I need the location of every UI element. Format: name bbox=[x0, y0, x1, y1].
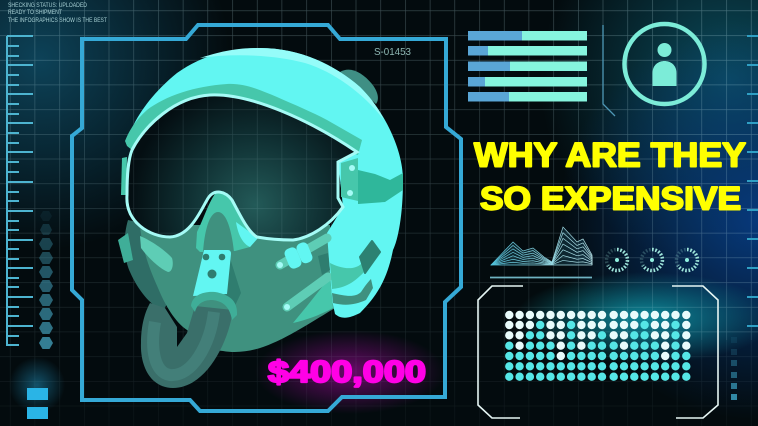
icon: user in circle bbox=[624, 24, 704, 104]
left ruler bbox=[7, 36, 33, 346]
helmet band bbox=[125, 84, 362, 155]
title: WHY ARE THEY bbox=[474, 136, 746, 174]
shell highlight bbox=[200, 48, 384, 120]
status text block: SHECKING STATUS: UPLOADED bbox=[8, 2, 87, 9]
visor grid reflection bbox=[127, 95, 357, 240]
shell vent bbox=[360, 241, 380, 273]
upper mask buckle bbox=[277, 238, 330, 275]
side visor pad bbox=[121, 157, 127, 195]
oxygen hose bbox=[141, 303, 233, 388]
oxygen mask bbox=[140, 225, 335, 352]
status text block: THE INFOGRAPHICS SHOW IS THE BEST bbox=[8, 17, 107, 24]
helmet rear bump bbox=[340, 70, 378, 104]
chin strap bbox=[358, 170, 403, 204]
bracket line bbox=[603, 25, 615, 116]
shell hook bbox=[332, 279, 373, 305]
area chart bbox=[491, 227, 592, 265]
dot matrix display bbox=[509, 315, 686, 377]
scanner frame bbox=[72, 25, 461, 411]
helmet shell bbox=[127, 48, 403, 318]
side pad bbox=[118, 233, 133, 263]
status text block: READY TO SHIPMENT bbox=[8, 9, 62, 16]
nose bridge bbox=[196, 190, 258, 252]
price tag: $400,000 bbox=[268, 354, 426, 389]
lower mask strap bbox=[284, 277, 333, 323]
visor glass bbox=[127, 95, 357, 240]
visor clip bbox=[341, 158, 358, 201]
side strap bbox=[125, 220, 175, 311]
display brackets bbox=[478, 286, 718, 418]
right edge ticks bbox=[747, 36, 758, 326]
dial gauges bbox=[606, 250, 698, 270]
hexagon column bbox=[39, 211, 53, 349]
helmet illustration bbox=[118, 48, 403, 388]
small square column bbox=[731, 337, 737, 400]
status text block bbox=[8, 2, 107, 24]
hose collar bbox=[191, 292, 237, 320]
label: serial number: S-01453 bbox=[374, 46, 411, 58]
status bars bbox=[468, 31, 587, 102]
mouth plate bbox=[193, 250, 241, 312]
icon: two blue squares bbox=[27, 388, 48, 419]
title: SO EXPENSIVE bbox=[480, 180, 741, 216]
title bbox=[474, 136, 746, 216]
cheek pad bbox=[140, 236, 173, 272]
shell side band bbox=[330, 262, 364, 289]
chart baseline bbox=[490, 276, 592, 278]
